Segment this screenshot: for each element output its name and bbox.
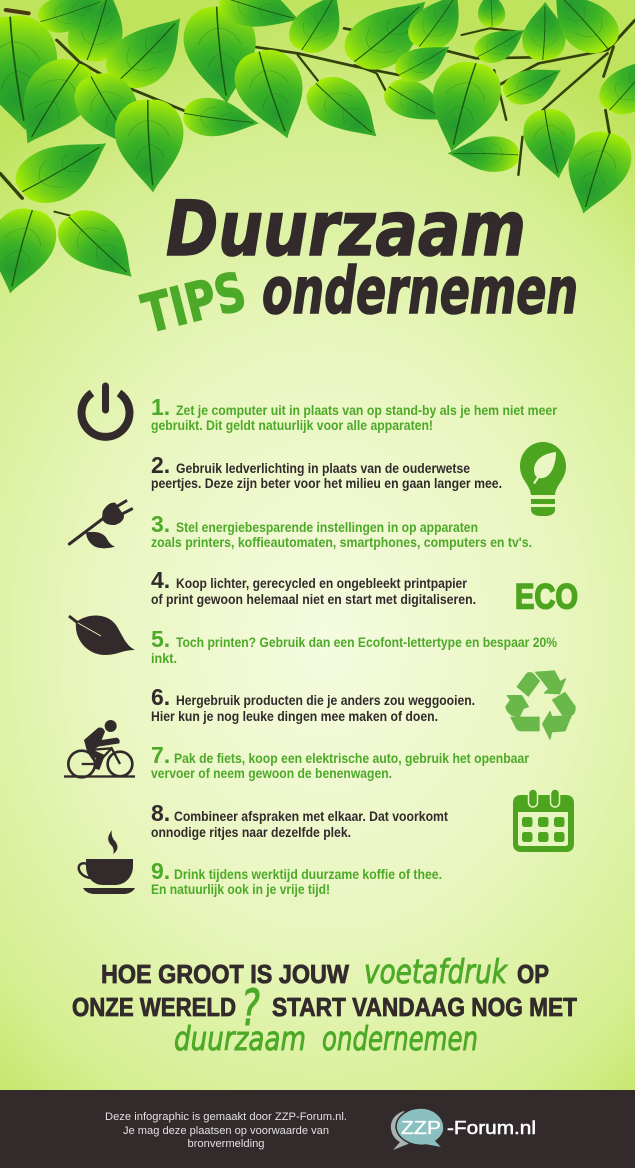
- tip 8: 8.: [151, 800, 170, 826]
- tip 5: inkt.: [151, 651, 177, 666]
- title: [136, 184, 578, 346]
- tip 6: 6.: [151, 684, 170, 710]
- icon: light bulb with leaf: [520, 442, 566, 516]
- tip 5: 5.: [151, 626, 170, 652]
- tip 7: [151, 742, 530, 781]
- tip 4: Koop lichter, gerecycled en ongebleekt printpapier: [176, 576, 468, 591]
- icon: calendar: [513, 789, 574, 852]
- logo: ZZP: [401, 1118, 441, 1138]
- tip 9: En natuurlijk ook in je vrije tijd!: [151, 882, 330, 897]
- icon: cyclist: [64, 720, 135, 778]
- tip 9: [151, 858, 442, 897]
- tip 1: 1.: [151, 394, 170, 420]
- footer text: Je mag deze plaatsen op voorwaarde van: [123, 1125, 329, 1137]
- tip 1: gebruikt. Dit geldt natuurlijk voor alle apparaten!: [151, 418, 433, 433]
- tip 8: [151, 800, 448, 840]
- footer text: bronvermelding: [188, 1138, 264, 1150]
- icon: ECO: ECO: [515, 578, 578, 616]
- tip 4: [151, 567, 476, 607]
- tip 3: zoals printers, koffieautomaten, smartphones, computers en tv's.: [151, 535, 532, 550]
- tip 3: [151, 511, 532, 550]
- script words: duurzaam: duurzaam: [174, 1019, 306, 1058]
- tip 2: 2.: [151, 452, 170, 478]
- icon: coffee cup: [79, 830, 135, 894]
- logo: -Forum.nl: [447, 1118, 536, 1138]
- footer: [0, 1090, 635, 1168]
- tip 2: Gebruik ledverlichting in plaats van de ouderwetse: [176, 461, 470, 476]
- tip 1: Zet je computer uit in plaats van op stand-by als je hem niet meer: [176, 403, 558, 418]
- icon: dark leaf: [69, 616, 135, 655]
- tip 7: vervoer of neem gewoon de benenwagen.: [151, 766, 392, 781]
- icon: recycle: [506, 671, 575, 739]
- tip 2: [151, 452, 502, 491]
- leaf cluster: [0, 0, 635, 299]
- icon: plug with leaf: [69, 501, 132, 548]
- line 2 left: ONZE WERELD: [72, 992, 236, 1022]
- tip 3: Stel energiebesparende instellingen in op apparaten: [176, 520, 478, 535]
- leaves and branches: [0, 0, 635, 299]
- script words: ondernemen: ondernemen: [322, 1019, 478, 1058]
- title word: Duurzaam: Duurzaam: [166, 184, 526, 273]
- line 1: HOE GROOT IS JOUW: [101, 959, 349, 989]
- closing message: [72, 952, 577, 1058]
- tip 7: 7.: [151, 742, 170, 768]
- tip 8: onnodige ritjes naar dezelfde plek.: [151, 825, 351, 840]
- tip 2: peertjes. Deze zijn beter voor het milieu en gaan langer mee.: [151, 476, 502, 491]
- question mark: ?: [241, 979, 260, 1037]
- tip 6: Hier kun je nog leuke dingen mee maken of doen.: [151, 709, 438, 724]
- script word: voetafdruk: voetafdruk: [364, 952, 509, 991]
- tip 3: 3.: [151, 511, 170, 537]
- tip 1: [151, 394, 558, 433]
- line 2 right: START VANDAAG NOG MET: [272, 992, 577, 1022]
- tip 6: [151, 684, 475, 724]
- tip 9: Drink tijdens werktijd duurzame koffie of thee.: [174, 867, 442, 882]
- tip 8: Combineer afspraken met elkaar. Dat voorkomt: [174, 809, 448, 824]
- tip 4: 4.: [151, 567, 170, 593]
- tip 4: of print gewoon helemaal niet en start met digitaliseren.: [151, 592, 476, 607]
- footer text: [105, 1111, 347, 1150]
- branches: [0, 10, 635, 218]
- icon: power button: [81, 386, 130, 437]
- footer text: Deze infographic is gemaakt door ZZP-Forum.nl.: [105, 1111, 347, 1123]
- title word: TIPS: TIPS: [136, 261, 252, 346]
- tip 7: Pak de fiets, koop een elektrische auto, gebruik het openbaar: [174, 751, 530, 766]
- word: OP: OP: [517, 959, 549, 989]
- tip 5: Toch printen? Gebruik dan een Ecofont-lettertype en bespaar 20%: [176, 635, 557, 650]
- tip 6: Hergebruik producten die je anders zou weggooien.: [176, 693, 475, 708]
- logo: [391, 1108, 536, 1150]
- tip 5: [151, 626, 557, 666]
- tip 9: 9.: [151, 858, 170, 884]
